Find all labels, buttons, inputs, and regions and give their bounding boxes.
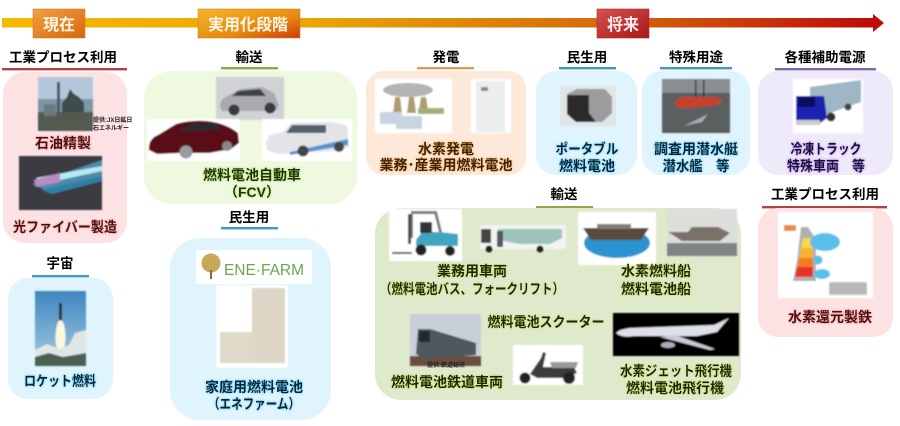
label: hydrogen power and commercial fuel cells: [380, 141, 512, 173]
image: red FCV sedan: [147, 119, 240, 161]
stage badge: future: 将来: [607, 16, 639, 34]
stage badge: future: [597, 9, 649, 38]
image: hydrogen ship: [578, 212, 656, 265]
label: fuel cell railway vehicle: 燃料電池鉄道車両: [391, 374, 503, 390]
panel: auxiliary power: [758, 71, 893, 175]
heading: industrial process left: 工業プロセス利用: [9, 50, 117, 65]
label: household fuel cell: （エネファーム）: [208, 396, 300, 412]
label: commercial vehicles: 業務用車両: [437, 263, 507, 279]
photo credit: railway institute: 提供:鉄道総研: [427, 361, 465, 369]
panel: portable: [536, 71, 637, 175]
heading: industrial process right: [762, 187, 887, 208]
label: portable fuel cell: ポータブル: [556, 141, 618, 157]
label: hydrogen power and commercial fuel cells: 業務･産業用燃料電池: [380, 157, 512, 173]
heading: space: 宇宙: [46, 256, 74, 271]
heading: transport right: 輸送: [550, 186, 578, 202]
heading: consumer right: 民生用: [567, 50, 607, 65]
stage badge: practical stage: 実用化段階: [208, 16, 288, 34]
image: oil refinery: [38, 77, 93, 131]
label: refrigerated truck and special vehicles: [787, 141, 865, 174]
photo credit: 石エネルギー: [93, 124, 129, 132]
label: portable fuel cell: 燃料電池: [559, 158, 615, 174]
heading: consumer right: [559, 50, 616, 69]
image: research submersible: [662, 79, 730, 133]
label: research submersibles: 潜水艦 等: [662, 158, 730, 174]
heading: auxiliary power: [775, 49, 876, 70]
label: research submersibles: 調査用潜水艇: [654, 141, 738, 157]
label: hydrogen fuel and fuel cell ships: 水素燃料船: [621, 263, 691, 279]
label: hydrogen power and commercial fuel cells: 水素発電: [418, 141, 474, 157]
image: optical fibre: [19, 156, 102, 210]
panel: space: [8, 278, 113, 399]
heading: space: [32, 256, 89, 277]
label: refrigerated truck and special vehicles: 冷凍トラック: [790, 141, 862, 157]
label: hydrogen jet and fuel cell aircraft: 燃料電池飛行機: [626, 380, 724, 396]
label: household fuel cell: [205, 379, 303, 412]
image: boat: [667, 209, 737, 256]
label: refrigerated truck and special vehicles: 特殊車両 等: [787, 158, 865, 174]
label: rocket fuel: ロケット燃料: [24, 373, 96, 389]
image: Ene-Farm logo: [196, 250, 312, 284]
heading: consumer left: 民生用: [229, 210, 269, 225]
heading: consumer left: [221, 210, 278, 229]
heading: power generation: 発電: [432, 50, 460, 65]
heading: auxiliary power: 各種補助電源: [784, 49, 866, 65]
image: blue-white FC SUV: [262, 119, 352, 161]
label: commercial vehicles: （燃料電池バス、フォークリフト）: [380, 281, 564, 297]
image: rocket launch: [35, 291, 86, 366]
heading: industrial process left: [2, 50, 127, 70]
photo credit: [93, 116, 132, 132]
panel: power generation: [366, 71, 526, 175]
label: oil refining: 石油精製: [35, 135, 91, 151]
heading: special use: 特殊用途: [669, 49, 723, 65]
timeline arrow: [2, 14, 884, 32]
image: refrigerated truck: [793, 79, 863, 133]
image: commercial fuel cell cabinet: [471, 79, 511, 133]
label: fuel cell scooter: 燃料電池スクーター: [488, 314, 604, 330]
heading: industrial process right: 工業プロセス利用: [771, 187, 879, 202]
label: optical fibre manufacturing: 光ファイバー製造: [13, 219, 117, 235]
heading: transport FCV: [221, 49, 278, 69]
label: hydrogen jet and fuel cell aircraft: [620, 363, 732, 396]
image: fuel cell train: [410, 314, 481, 366]
panel: special use: [642, 71, 750, 175]
image: Ene-Farm logo: ENE·FARM: [224, 262, 304, 279]
panel: industrial process left: [3, 72, 132, 243]
image: forklift: [389, 209, 462, 261]
label: fuel cell vehicle: （FCV）: [224, 184, 280, 200]
stage badge: current: 現在: [43, 15, 75, 34]
heading: transport FCV: 輸送: [236, 49, 263, 65]
image: blast furnace diagram: [778, 212, 873, 298]
image: fuel cell scooter: [513, 345, 583, 385]
panel: fuel cell vehicles: [144, 71, 357, 204]
image: concept SUV: [216, 77, 284, 120]
photo credit: 提供:JX日鉱日: [93, 116, 132, 124]
label: hydrogen fuel and fuel cell ships: [621, 263, 691, 297]
label: hydrogen reduction steelmaking: 水素還元製鉄: [788, 309, 872, 325]
heading: power generation: [417, 50, 474, 69]
image: hydrogen power plant: [375, 79, 452, 133]
heading: transport right: [536, 186, 593, 208]
panel: transport vehicles: [375, 208, 741, 400]
image: fuel cell bus: [480, 225, 566, 252]
label: fuel cell vehicle: [203, 167, 301, 200]
panel: hydrogen reduction steelmaking: [758, 208, 893, 337]
stage badge: practical stage: [198, 9, 300, 38]
label: hydrogen jet and fuel cell aircraft: 水素ジェット飛行機: [620, 363, 732, 379]
label: research submersibles: [654, 141, 738, 174]
label: portable fuel cell: [556, 141, 618, 174]
label: fuel cell vehicle: 燃料電池自動車: [203, 167, 301, 183]
image: Ene-Farm unit: [216, 285, 288, 368]
image: airplane: [613, 313, 739, 356]
panel: Ene-Farm: [170, 238, 331, 420]
stage badge: current: [33, 9, 85, 38]
label: hydrogen fuel and fuel cell ships: 燃料電池船: [621, 281, 691, 297]
label: household fuel cell: 家庭用燃料電池: [205, 379, 303, 395]
heading: special use: [660, 49, 732, 69]
image: portable fuel cell: [560, 86, 616, 126]
label: commercial vehicles: [380, 263, 564, 297]
